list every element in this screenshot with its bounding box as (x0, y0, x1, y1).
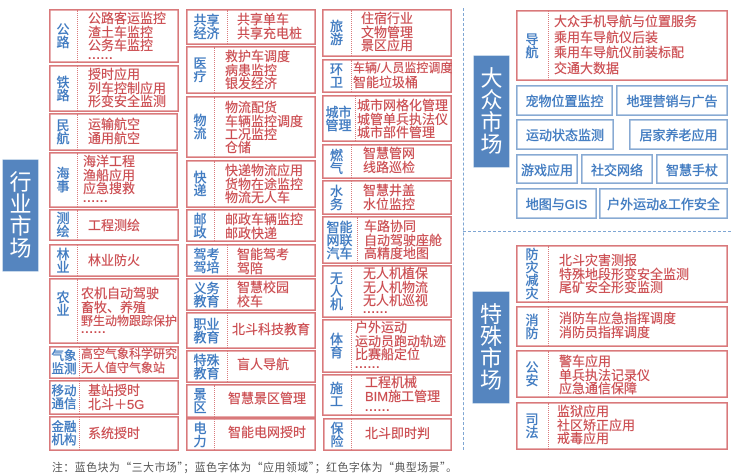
panel: 智能网联汽车 (322, 216, 452, 264)
panel: 特殊教育: 盲人导航 (237, 357, 289, 372)
panel: 智能网联汽车: 汽车 (326, 246, 352, 260)
panel: 海事: 应急搜救 (83, 181, 135, 196)
panel: 保险: 北斗即时判 (365, 426, 430, 441)
panel: 农业: ...... (81, 322, 106, 336)
box: 地理营销与广告 (616, 85, 728, 116)
box: 户外运动&工作安全 (599, 188, 728, 219)
panel: 共享经济 (186, 9, 316, 45)
panel: 特殊教育: 特殊 (193, 352, 220, 368)
panel: 智能网联汽车: 车路协同 (364, 219, 416, 234)
panel: 体育: 比赛船定位 (355, 347, 420, 362)
panel: 民航: 通用航空 (88, 131, 140, 146)
panel: 施工: 工程机械 (365, 375, 417, 390)
panel: 气象监测: 高空气象科学研究 (81, 347, 177, 361)
panel: 特殊教育: 教育 (193, 366, 220, 380)
panel: 无人机: ...... (363, 302, 388, 316)
panel: 导航: 大众手机导航与位置服务 (554, 14, 697, 29)
market block: 特殊市场 (473, 292, 509, 403)
panel: 旅游 (322, 9, 452, 57)
panel: 消防: 消防员指挥调度 (559, 325, 650, 340)
panel: 环卫: 环 (330, 62, 343, 77)
panel: 物流: 工况监控 (225, 127, 277, 142)
panel: 铁路: 授时应用 (88, 67, 140, 82)
panel: 景区: 景 (193, 387, 206, 402)
panel: 导航: 导 (525, 32, 538, 46)
panel: 海事: 渔船应用 (83, 168, 135, 183)
panel: 海事: ...... (83, 191, 108, 205)
panel: 旅游: 游 (330, 32, 343, 47)
panel: 导航: 乘用车导航仪后装 (554, 30, 658, 45)
panel: 施工: BIM施工管理 (365, 389, 440, 404)
panel: 旅游: 景区应用 (361, 38, 413, 53)
panel: 电力 (186, 418, 316, 451)
panel: 职业教育: 北斗科技教育 (232, 322, 310, 337)
box: 智慧手杖: 智慧手杖 (666, 162, 718, 178)
panel: 医疗: 疗 (193, 69, 206, 84)
panel: 消防: 消防车应急指挥调度 (559, 311, 676, 326)
panel: 环卫 (322, 59, 452, 93)
panel: 导航: 航 (525, 44, 538, 60)
panel: 物流: 仓储 (225, 140, 251, 155)
panel: 林业: 林 (56, 246, 70, 262)
panel: 防灾减灾: 北斗灾害测报 (559, 253, 637, 268)
panel: 邮政: 邮政车辆监控 (225, 212, 303, 227)
panel: 燃气: 气 (330, 160, 343, 176)
panel: 民航 (49, 113, 178, 151)
market block: 特殊市场: 殊 (480, 324, 502, 348)
panel: 燃气: 燃 (330, 148, 343, 162)
panel: 气象监测 (49, 346, 179, 379)
panel: 物流: 流 (193, 126, 206, 141)
panel: 农业: 畜牧、养殖 (81, 300, 146, 315)
panel: 共享经济: 经济 (193, 26, 220, 41)
panel: 智能网联汽车: 高精度地图 (364, 246, 429, 261)
box: 运动状态监测 (516, 119, 614, 150)
panel: 环卫: 卫 (330, 75, 343, 90)
panel: 公路: ...... (88, 48, 113, 62)
panel: 民航: 航 (56, 131, 70, 146)
panel: 铁路: 铁 (56, 74, 70, 90)
panel: 邮政: 政 (193, 224, 206, 240)
panel: 水务: 水 (330, 184, 343, 198)
panel: 快递 (186, 160, 316, 208)
panel: 司法: 司 (525, 412, 538, 427)
panel: 物流: 物 (193, 113, 206, 128)
panel: 移动通信: 移动 (51, 384, 76, 398)
box: 运动状态监测: 运动状态监测 (526, 128, 604, 143)
panel: 消防: 防 (525, 326, 538, 340)
panel: 公安 (516, 350, 728, 398)
box: 户外运动&工作安全: 户外运动&工作安全 (607, 197, 720, 212)
panel: 景区: 区 (193, 400, 206, 415)
panel: 义务教育 (186, 278, 316, 311)
panel: 民航: 运输航空 (88, 117, 140, 132)
panel: 共享经济: 共享充电桩 (237, 26, 302, 41)
box: 社交网络: 社交网络 (591, 162, 643, 178)
panel: 导航: 交通大数据 (554, 61, 619, 76)
panel: 金融机构 (49, 416, 179, 451)
panel: 城市管理: 城市 (325, 104, 352, 120)
box: 游戏应用 (516, 154, 578, 184)
panel: 保险: 保 (330, 420, 344, 436)
panel: 海事: 海 (56, 166, 70, 181)
panel: 防灾减灾: 灾 (525, 260, 538, 275)
panel: 共享经济: 共享单车 (237, 12, 289, 27)
box: 宠物位置监控: 宠物位置监控 (525, 94, 604, 109)
panel: 施工: ...... (365, 400, 390, 414)
box: 宠物位置监控 (516, 85, 613, 116)
panel: 司法: 社区矫正应用 (557, 418, 635, 433)
panel: 保险: 险 (330, 434, 344, 448)
panel: 义务教育: 义务 (193, 280, 220, 296)
panel: 公安: 警车应用 (559, 354, 611, 369)
panel: 邮政: 邮 (193, 212, 206, 226)
panel: 司法 (516, 402, 728, 450)
panel: 金融机构: 系统授时 (88, 426, 140, 441)
panel: 公路: 渣土车监控 (88, 25, 153, 40)
panel: 林业: 业 (56, 260, 70, 274)
panel: 体育: 户外运动 (355, 320, 407, 335)
panel: 快递: 物流无人车 (225, 190, 290, 205)
panel: 公路: 公 (56, 22, 70, 37)
market block: 行业市场: 市 (9, 214, 32, 238)
panel: 物流: 车辆监控调度 (225, 114, 303, 129)
panel: 物流 (186, 96, 316, 158)
panel: 医疗: 银发经济 (225, 76, 277, 91)
panel: 司法: 法 (525, 425, 538, 440)
panel: 旅游: 文物管理 (361, 25, 413, 40)
panel: 施工: 工 (330, 394, 343, 409)
panel: 司法: 监狱应用 (557, 404, 609, 419)
panel: 公安: 公 (525, 360, 538, 375)
panel: 体育: 育 (330, 345, 343, 360)
market block: 特殊市场: 场 (480, 368, 502, 392)
panel: 铁路 (49, 65, 179, 112)
panel: 职业教育: 教育 (193, 330, 220, 344)
panel: 职业教育: 职业 (193, 316, 220, 332)
panel: 职业教育 (186, 312, 316, 349)
panel: 公路: 公路客运监控 (88, 11, 166, 26)
market block: 大众市场: 市 (480, 110, 502, 134)
panel: 林业: 林业防火 (88, 253, 140, 268)
panel: 无人机: 无人机巡视 (363, 293, 428, 308)
panel: 环卫: 智能垃圾桶 (353, 75, 418, 90)
panel: 移动通信: 北斗＋5G (88, 397, 144, 412)
box: 智慧手杖 (656, 154, 728, 184)
box: 居家养老应用: 居家养老应用 (639, 128, 718, 143)
panel: 海事: 事 (56, 179, 70, 194)
panel: 驾考驾培: 驾培 (193, 260, 220, 274)
market block: 特殊市场: 市 (480, 346, 502, 370)
panel: 防灾减灾: 尾矿安全形变监测 (559, 280, 663, 295)
panel: 气象监测: 监测 (51, 362, 76, 376)
panel: 景区: 智慧景区管理 (228, 391, 306, 406)
panel: 医疗: 病患监控 (225, 63, 277, 78)
box: 居家养老应用 (629, 119, 728, 150)
box: 游戏应用: 游戏应用 (521, 162, 573, 178)
panel: 施工 (322, 374, 452, 416)
panel: 邮政: 邮政快递 (225, 226, 277, 241)
panel: 电力: 力 (193, 434, 206, 448)
panel: 快递: 货物在途监控 (225, 177, 303, 192)
panel: 金融机构: 金融 (51, 420, 76, 434)
panel: 医疗 (186, 46, 316, 94)
market block: 行业市场: 场 (9, 236, 32, 260)
panel: 无人机: 无人机物流 (363, 280, 428, 295)
panel: 水务: 务 (330, 196, 343, 212)
panel: 快递: 快递物流应用 (225, 163, 303, 178)
panel: 水务: 水位监控 (363, 197, 415, 212)
panel: 测绘: 工程测绘 (88, 218, 140, 233)
panel: 体育: ...... (355, 357, 380, 371)
panel: 农业: 农 (56, 290, 70, 305)
panel: 施工: 施 (330, 381, 343, 396)
panel: 体育 (322, 319, 452, 373)
panel: 城市管理: 城管单兵执法仪 (357, 112, 448, 127)
panel: 公安: 应急通信保障 (559, 381, 637, 396)
panel: 旅游: 住宿行业 (361, 11, 413, 26)
panel: 驾考驾培: 驾考 (193, 246, 220, 262)
panel: 义务教育: 教育 (193, 294, 220, 308)
panel: 城市管理: 城市部件管理 (357, 125, 435, 140)
market block: 行业市场 (3, 160, 38, 271)
panel: 测绘: 测 (56, 211, 70, 226)
box: 地理营销与广告: 地理营销与广告 (626, 94, 718, 109)
panel: 燃气: 线路巡检 (363, 160, 415, 175)
panel: 快递: 快 (193, 170, 206, 185)
panel: 水务 (322, 180, 452, 215)
panel: 公安: 单兵执法记录仪 (559, 368, 650, 383)
panel: 物流: 物流配货 (225, 100, 277, 115)
panel: 水务: 智慧井盖 (363, 183, 415, 198)
panel: 义务教育: 智慧校园 (237, 280, 289, 295)
panel: 驾考驾培 (186, 244, 316, 277)
panel: 防灾减灾: 减 (525, 273, 538, 288)
panel: 导航 (516, 10, 728, 81)
panel: 移动通信: 通信 (51, 396, 76, 410)
panel: 医疗: 医 (193, 56, 206, 71)
panel: 公路: 路 (56, 35, 70, 50)
panel: 无人机: 机 (330, 297, 343, 312)
panel: 移动通信 (49, 380, 179, 415)
panel: 司法: 戒毒应用 (557, 431, 609, 446)
panel: 防灾减灾: 特殊地段形变安全监测 (559, 267, 689, 282)
panel: 无人机: 无 (330, 271, 343, 286)
panel: 农业 (49, 278, 179, 344)
panel: 导航: 乘用车导航仪前装标配 (554, 45, 684, 60)
panel: 测绘 (49, 209, 179, 241)
panel: 无人机 (322, 265, 452, 318)
panel: 海事: 海洋工程 (83, 154, 135, 169)
panel: 保险 (323, 418, 452, 451)
panel: 防灾减灾 (516, 245, 728, 303)
panel: 城市管理: 管理 (325, 118, 352, 132)
panel: 防灾减灾: 防 (525, 247, 538, 262)
panel: 智能网联汽车: 智能 (326, 220, 352, 234)
panel: 铁路: 形变安全监测 (88, 94, 166, 109)
market block: 大众市场 (474, 56, 509, 167)
panel: 铁路: 列车控制应用 (88, 81, 166, 96)
panel: 公路: 公务车监控 (88, 38, 153, 53)
panel: 电力: 智能电网授时 (228, 425, 306, 440)
market block: 大众市场: 众 (480, 88, 502, 112)
box: 社交网络 (581, 154, 653, 184)
panel: 金融机构: 机构 (51, 432, 76, 446)
panel: 特殊教育 (186, 350, 316, 383)
panel: 移动通信: 基站授时 (88, 383, 140, 398)
panel: 铁路: 路 (56, 88, 70, 102)
panel: 防灾减灾: 灾 (525, 286, 538, 301)
market block: 大众市场: 大 (480, 66, 502, 90)
panel: 农业: 业 (56, 303, 70, 318)
panel: 邮政 (186, 209, 316, 242)
panel: 快递: 递 (193, 183, 206, 198)
panel: 共享经济: 共享 (193, 13, 220, 28)
panel: 公路 (49, 9, 179, 63)
market block: 特殊市场: 特 (480, 302, 502, 326)
panel: 驾考驾培: 驾陪 (237, 261, 263, 276)
panel: 海事 (49, 152, 178, 208)
panel: 医疗: 救护车调度 (225, 49, 290, 64)
panel: 燃气: 智慧管网 (363, 146, 415, 161)
market block: 大众市场: 场 (480, 132, 502, 156)
panel: 环卫: 车辆/人员监控调度 (353, 61, 452, 75)
panel: 消防 (516, 306, 728, 347)
panel: 体育: 运动员跑动轨迹 (355, 334, 446, 349)
panel: 民航: 民 (56, 118, 70, 133)
note: 注：蓝色块为“三大市场”；蓝色字体为“应用领域”；红色字体为“典型场景”。 (52, 459, 457, 475)
panel: 农业: 农机自动驾驶 (81, 286, 159, 301)
panel: 无人机: 人 (330, 284, 343, 299)
panel: 农业: 野生动物跟踪保护 (81, 314, 177, 328)
panel: 电力: 电 (193, 420, 206, 436)
panel: 气象监测: 无人值守气象站 (81, 361, 165, 375)
panel: 智能网联汽车: 网联 (326, 232, 352, 248)
panel: 景区 (186, 384, 316, 418)
panel: 林业 (49, 244, 179, 277)
panel: 消防: 消 (525, 312, 538, 328)
panel: 智能网联汽车: 自动驾驶座舱 (364, 233, 442, 248)
box: 地图与GIS: 地图与GIS (526, 197, 587, 212)
panel: 义务教育: 校车 (237, 294, 263, 309)
panel: 城市管理 (322, 95, 452, 142)
panel: 燃气 (322, 144, 452, 179)
panel: 公安: 安 (525, 373, 538, 388)
market block: 行业市场: 业 (9, 192, 32, 216)
market block: 行业市场: 行 (9, 170, 32, 194)
panel: 无人机: 无人机植保 (363, 266, 428, 281)
panel: 驾考驾培: 智能驾考 (237, 247, 289, 262)
panel: 旅游: 旅 (330, 19, 343, 34)
panel: 测绘: 绘 (56, 224, 70, 239)
panel: 城市管理: 城市网格化管理 (357, 98, 448, 113)
panel: 体育: 体 (330, 332, 343, 347)
box: 地图与GIS (516, 188, 597, 219)
panel: 气象监测: 气象 (51, 348, 76, 362)
